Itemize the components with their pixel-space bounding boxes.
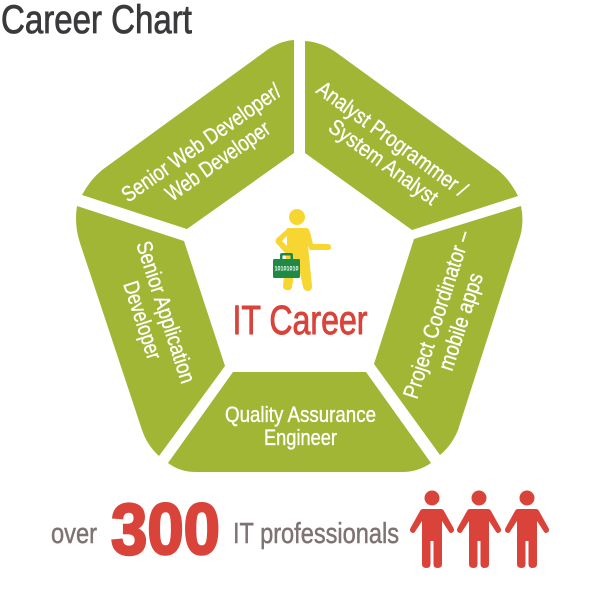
panel: Analyst Programmer bbox=[305, 41, 518, 230]
icon: person 2 bbox=[457, 490, 501, 568]
stat: over 300 IT professionals: 300 bbox=[111, 490, 220, 570]
stat: over 300 IT professionals: IT professionals bbox=[233, 518, 399, 550]
panel: Project Coordinator bbox=[374, 206, 522, 455]
icon: person 1 bbox=[410, 490, 454, 568]
label: Senior Application Developer: Developer bbox=[118, 278, 167, 363]
label: Analyst Programmer: Analyst Programmer / bbox=[312, 76, 473, 202]
icon: person with briefcase bbox=[273, 209, 331, 291]
icon: person 3 bbox=[505, 490, 549, 568]
label: Senior Web Developer: Senior Web Developer/ bbox=[117, 78, 286, 207]
label: Senior Application Developer: Senior Application bbox=[131, 238, 201, 386]
label: Quality Assurance Engineer: Engineer bbox=[264, 425, 337, 450]
panel: Senior Web Developer bbox=[82, 40, 294, 229]
label: Senior Application Developer bbox=[118, 238, 201, 386]
label: Senior Web Developer: Web Developer bbox=[161, 116, 275, 206]
label: Quality Assurance Engineer: Quality Assurance bbox=[225, 402, 376, 427]
icon: three people bbox=[410, 490, 549, 568]
panel: Quality Assurance Engineer bbox=[168, 372, 431, 472]
stat: over 300 IT professionals bbox=[51, 490, 399, 570]
heading: IT Career: IT Career bbox=[232, 297, 368, 343]
icon: briefcase: 10101010 bbox=[274, 266, 299, 272]
stat: over 300 IT professionals: over bbox=[51, 518, 97, 550]
label: Analyst Programmer: System Analyst bbox=[324, 114, 443, 210]
label: Quality Assurance Engineer bbox=[225, 402, 376, 450]
label: Project Coordinator: mobile apps bbox=[433, 270, 488, 374]
panel: Senior Application Developer bbox=[76, 206, 225, 456]
label: Project Coordinator: Project Coordinator – bbox=[398, 227, 476, 402]
